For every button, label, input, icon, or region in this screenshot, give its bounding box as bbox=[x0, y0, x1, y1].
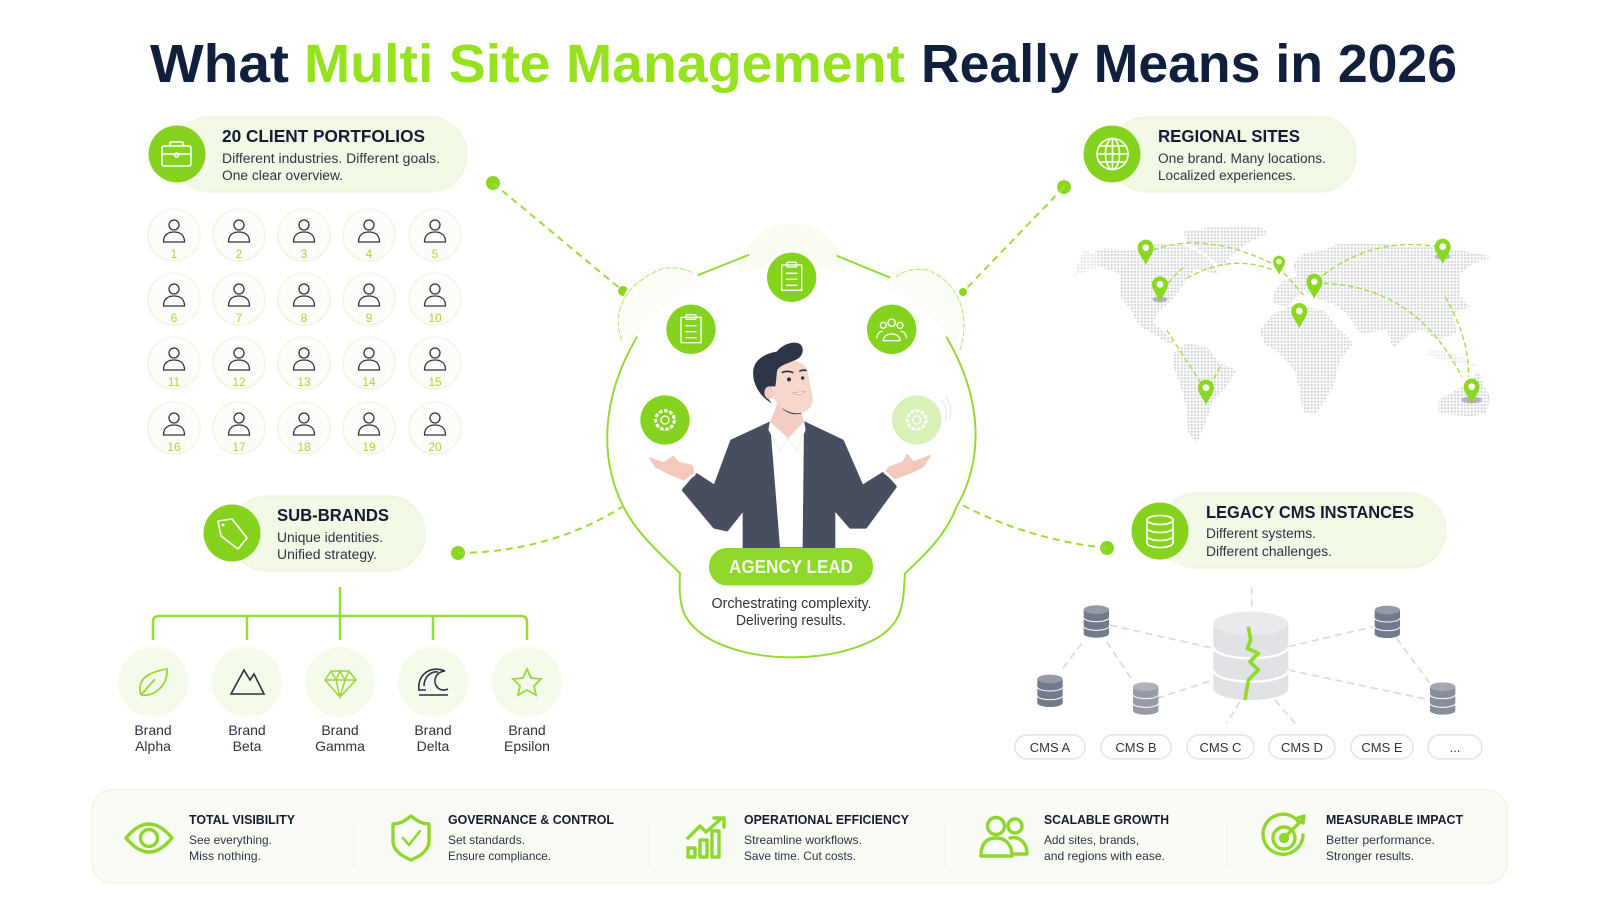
client grid: 7 bbox=[236, 311, 243, 325]
icon: shield bbox=[393, 816, 429, 860]
icon: left checklist bbox=[666, 305, 716, 354]
cms chips: CMS E bbox=[1361, 740, 1403, 755]
icon: right gear faded bbox=[892, 395, 951, 445]
icon: briefcase bbox=[148, 126, 206, 182]
benefit: operational efficiency: OPERATIONAL EFFICIENCY bbox=[744, 813, 910, 827]
client grid: 2 bbox=[236, 247, 243, 261]
center caption: Delivering results. bbox=[736, 613, 846, 629]
brand: gamma bbox=[305, 647, 375, 754]
description: Unique identities. bbox=[277, 530, 383, 545]
description bbox=[222, 151, 440, 183]
benefit: governance: Ensure compliance. bbox=[448, 849, 551, 863]
description: Different challenges. bbox=[1206, 544, 1332, 559]
header pill bbox=[1160, 493, 1446, 568]
title bbox=[150, 34, 1457, 94]
connector: legacy to center bbox=[962, 505, 1114, 555]
cms chips: CMS B bbox=[1115, 740, 1157, 755]
header pill bbox=[230, 496, 425, 571]
benefit: measurable impact: Better performance. bbox=[1326, 833, 1435, 847]
center caption: Orchestrating complexity. bbox=[712, 596, 872, 612]
panel: agency lead center bbox=[607, 223, 976, 657]
client grid bbox=[148, 209, 461, 454]
title: Really Means in 2026 bbox=[921, 34, 1457, 94]
cms network diagram bbox=[1037, 587, 1455, 723]
dotted world map bbox=[1073, 227, 1493, 443]
benefit: measurable impact bbox=[1263, 813, 1463, 863]
icon: left gear bbox=[640, 395, 690, 445]
client grid: 4 bbox=[366, 247, 373, 261]
heading: SUB-BRANDS bbox=[277, 505, 389, 525]
connector: regional to center bbox=[959, 180, 1071, 296]
brand: beta: Beta bbox=[233, 738, 262, 754]
description: Different industries. Different goals. bbox=[222, 151, 440, 166]
figure: agency lead bbox=[650, 343, 930, 547]
icon: target bbox=[1263, 814, 1304, 854]
icon: people bbox=[981, 818, 1027, 856]
agency lead badge: AGENCY LEAD bbox=[729, 557, 853, 577]
client grid: 6 bbox=[171, 311, 178, 325]
benefit: operational efficiency: Streamline workflows. bbox=[744, 833, 862, 847]
panel: 20 client portfolios bbox=[148, 117, 467, 454]
description: One brand. Many locations. bbox=[1158, 151, 1326, 166]
client grid: 10 bbox=[428, 311, 442, 325]
center artwork bbox=[607, 223, 976, 657]
brand: delta: Brand bbox=[414, 722, 452, 738]
client grid: 12 bbox=[232, 375, 246, 389]
client grid: 9 bbox=[366, 311, 373, 325]
client grid: 1 bbox=[171, 247, 178, 261]
client grid: 14 bbox=[362, 375, 376, 389]
client grid: 17 bbox=[232, 440, 246, 454]
benefit: total visibility: See everything. bbox=[189, 833, 272, 847]
benefit: operational efficiency bbox=[688, 813, 910, 863]
description bbox=[1206, 526, 1332, 559]
network links bbox=[1062, 587, 1430, 723]
icon: team bbox=[867, 305, 916, 354]
brand tree connector bbox=[153, 587, 527, 640]
icon: globe bbox=[1084, 126, 1140, 182]
benefit: operational efficiency: Save time. Cut costs. bbox=[744, 849, 856, 863]
central cracked database bbox=[1213, 612, 1288, 700]
connector: portfolios to center bbox=[486, 176, 628, 296]
client grid: 20 bbox=[428, 440, 442, 454]
benefit: total visibility: TOTAL VISIBILITY bbox=[189, 813, 296, 827]
brand: epsilon bbox=[492, 647, 562, 754]
center outline bbox=[607, 255, 976, 657]
benefit: scalable growth: SCALABLE GROWTH bbox=[1044, 813, 1169, 827]
cms chips: CMS C bbox=[1200, 740, 1241, 755]
client grid: 19 bbox=[362, 440, 376, 454]
client grid: 13 bbox=[297, 375, 311, 389]
center caption bbox=[712, 596, 872, 629]
benefit: scalable growth: and regions with ease. bbox=[1044, 849, 1165, 863]
cms chips: CMS D bbox=[1281, 740, 1323, 755]
cms chips: ... bbox=[1450, 740, 1460, 755]
description: One clear overview. bbox=[222, 168, 343, 183]
title: Multi Site Management bbox=[304, 34, 905, 94]
header pill bbox=[1110, 117, 1356, 192]
icon: database bbox=[1132, 502, 1188, 560]
map pins bbox=[1138, 239, 1482, 405]
brand: alpha: Alpha bbox=[135, 738, 171, 754]
client grid: 16 bbox=[167, 440, 181, 454]
panel: benefits strip bbox=[92, 790, 1507, 883]
client grid: 15 bbox=[428, 375, 442, 389]
brand: delta: Delta bbox=[417, 738, 450, 754]
client grid: 5 bbox=[432, 247, 439, 261]
brand: alpha: Brand bbox=[134, 722, 172, 738]
description: Different systems. bbox=[1206, 526, 1316, 541]
panel: legacy cms instances bbox=[1015, 493, 1482, 759]
brand: beta: Brand bbox=[228, 722, 266, 738]
heading: LEGACY CMS INSTANCES bbox=[1206, 502, 1414, 522]
benefit: total visibility: Miss nothing. bbox=[189, 849, 261, 863]
icon: tag bbox=[204, 504, 260, 562]
center halo bbox=[615, 223, 968, 657]
icon: eye bbox=[126, 824, 172, 852]
agency lead badge bbox=[709, 548, 873, 586]
client grid: 11 bbox=[168, 375, 181, 389]
heading: 20 CLIENT PORTFOLIOS bbox=[222, 126, 425, 146]
benefit: governance: GOVERNANCE & CONTROL bbox=[448, 813, 614, 827]
cms chips bbox=[1015, 735, 1482, 759]
brand: gamma: Gamma bbox=[315, 738, 365, 754]
panel: sub-brands bbox=[118, 496, 562, 754]
brand: beta bbox=[212, 647, 282, 754]
client grid: 3 bbox=[301, 247, 308, 261]
description bbox=[277, 530, 383, 562]
client grid: 18 bbox=[297, 440, 311, 454]
header pill bbox=[173, 117, 467, 192]
benefit: measurable impact: Stronger results. bbox=[1326, 849, 1414, 863]
small databases bbox=[1037, 605, 1455, 715]
description: Unified strategy. bbox=[277, 547, 377, 562]
client grid: 8 bbox=[301, 311, 308, 325]
brand: epsilon: Brand bbox=[508, 722, 546, 738]
benefit: measurable impact: MEASURABLE IMPACT bbox=[1326, 813, 1463, 827]
benefit: scalable growth: Add sites, brands, bbox=[1044, 833, 1139, 847]
benefit: governance: Set standards. bbox=[448, 833, 525, 847]
map routes bbox=[1153, 243, 1468, 387]
icon: top checklist bbox=[767, 253, 816, 302]
benefit: governance bbox=[393, 813, 614, 863]
icon: chart bbox=[688, 818, 724, 857]
brand: gamma: Brand bbox=[321, 722, 359, 738]
cms chips: CMS A bbox=[1030, 740, 1071, 755]
description bbox=[1158, 151, 1326, 183]
connector: sub-brands to center bbox=[451, 507, 622, 560]
panel: regional sites bbox=[1073, 117, 1493, 443]
title: What bbox=[150, 34, 289, 94]
heading: REGIONAL SITES bbox=[1158, 126, 1300, 146]
description: Localized experiences. bbox=[1158, 168, 1296, 183]
brand: epsilon: Epsilon bbox=[504, 738, 550, 754]
benefit: scalable growth bbox=[981, 813, 1169, 863]
benefit: total visibility bbox=[126, 813, 296, 863]
brand: alpha bbox=[118, 647, 188, 754]
brand: delta bbox=[398, 647, 468, 754]
